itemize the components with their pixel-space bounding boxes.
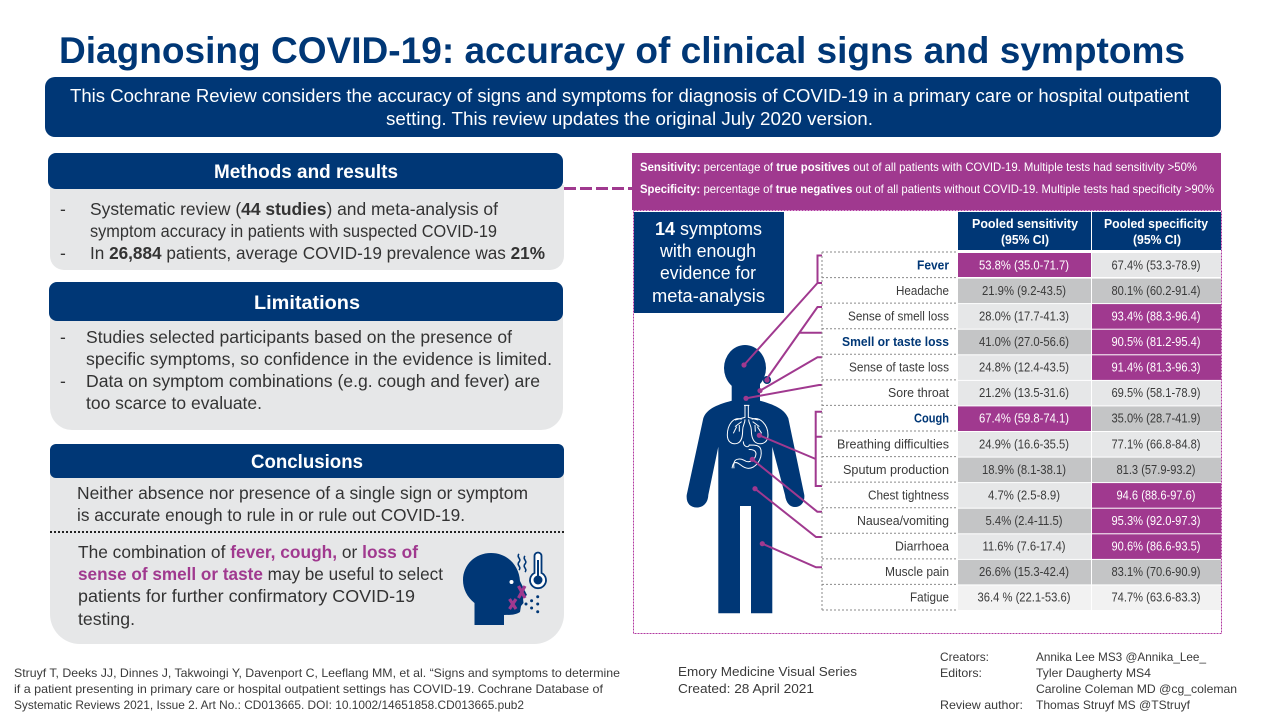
panel: accuracy figure bbox=[634, 210, 1222, 634]
row: Sense of taste loss: Sense of taste loss bbox=[849, 361, 949, 375]
row: Fatigue: 36.4 % (22.1-53.6) bbox=[978, 591, 1070, 605]
connector lines to symptoms bbox=[741, 256, 822, 567]
heading: limitations bbox=[49, 282, 563, 321]
row: Sense of smell loss: Sense of smell loss bbox=[848, 309, 949, 323]
panel: conclusions bbox=[50, 444, 564, 644]
series credit: Emory Medicine Visual Series bbox=[678, 664, 858, 679]
row: Diarrhoea: 11.6% (7.6-17.4) bbox=[982, 540, 1066, 554]
row: Sputum production: 81.3 (57.9-93.2) bbox=[1116, 463, 1196, 477]
row: Chest tightness: Chest tightness bbox=[868, 488, 949, 502]
callout: 14 symptoms bbox=[634, 212, 784, 313]
intro banner bbox=[45, 77, 1221, 137]
row: Headache: 80.1% (60.2-91.4) bbox=[1112, 284, 1200, 298]
text: methods bullets: symptom accuracy in patients with suspected COVID-19 bbox=[90, 221, 497, 241]
callout: 14 symptoms: meta-analysis bbox=[652, 286, 765, 306]
text: limitations bullets bbox=[60, 327, 552, 413]
row: Sense of smell loss: 93.4% (88.3-96.4) bbox=[1112, 309, 1200, 323]
citation bbox=[14, 666, 620, 712]
text: combination conclusion: sense of smell or taste may be useful to select bbox=[78, 564, 443, 584]
series credit: Created: 28 April 2021 bbox=[678, 681, 814, 696]
row: Muscle pain: Muscle pain bbox=[885, 565, 949, 579]
citation: Systematic Reviews 2021, Issue 2. Art No.: CD013665. DOI: 10.1002/14651858.CD013665.pub2 bbox=[14, 698, 524, 712]
heading: conclusions bbox=[50, 444, 564, 478]
icon: lungs and stomach bbox=[727, 405, 768, 468]
row: Headache: Headache bbox=[896, 284, 949, 298]
row: Headache: 21.9% (9.2-43.5) bbox=[982, 284, 1066, 298]
row: Fever bbox=[917, 253, 1221, 277]
row: Nausea/vomiting: 95.3% (92.0-97.3) bbox=[1112, 514, 1200, 528]
text: methods bullets: Systematic review (44 studies) and meta-analysis of bbox=[90, 199, 498, 219]
row: Nausea/vomiting bbox=[857, 509, 1221, 533]
text: methods bullets: - bbox=[60, 243, 66, 263]
creators and editors: Thomas Struyf MS @TStruyf bbox=[1036, 698, 1191, 712]
text: methods bullets: - bbox=[60, 199, 66, 219]
callout: 14 symptoms: 14 symptoms bbox=[655, 219, 762, 239]
text: combination conclusion: The combination of fever, cough, or loss of bbox=[78, 542, 418, 562]
row: Smell or taste loss: 90.5% (81.2-95.4) bbox=[1112, 335, 1200, 349]
panel: definitions bbox=[632, 153, 1221, 210]
intro banner: setting. This review updates the original July 2020 version. bbox=[386, 109, 873, 129]
icon: human body bbox=[687, 345, 804, 613]
row: Sense of taste loss bbox=[849, 355, 1221, 380]
callout: 14 symptoms: with enough bbox=[659, 241, 756, 261]
text: single sign conclusion: Neither absence nor presence of a single sign or symptom bbox=[77, 483, 528, 503]
row: Sputum production: Sputum production bbox=[843, 463, 949, 477]
creators and editors: Review author: bbox=[940, 698, 1023, 712]
row: Muscle pain: 83.1% (70.6-90.9) bbox=[1112, 565, 1200, 579]
row: Chest tightness: 4.7% (2.5-8.9) bbox=[988, 488, 1060, 502]
row: Smell or taste loss: Smell or taste loss bbox=[842, 335, 949, 349]
row: Diarrhoea bbox=[895, 534, 1221, 559]
citation: if a patient presenting in primary care or hospital outpatient settings has COVID-19. Cochrane Database of bbox=[14, 682, 604, 696]
text: limitations bullets: - bbox=[60, 371, 66, 391]
row: Diarrhoea: 90.6% (86.6-93.5) bbox=[1112, 540, 1200, 554]
text: limitations bullets: - bbox=[60, 327, 66, 347]
title: Diagnosing COVID-19: accuracy of clinical signs and symptoms bbox=[59, 30, 1185, 71]
table header: Pooled sensitivity bbox=[972, 217, 1078, 231]
row: Sore throat bbox=[888, 381, 1221, 405]
row: Headache bbox=[896, 279, 1221, 303]
text: limitations bullets: specific symptoms, so confidence in the evidence is limited. bbox=[86, 349, 552, 369]
callout: 14 symptoms: evidence for bbox=[660, 263, 756, 283]
row: Nausea/vomiting: 5.4% (2.4-11.5) bbox=[986, 514, 1062, 528]
text: methods bullets bbox=[60, 199, 545, 263]
text: combination conclusion: testing. bbox=[78, 609, 135, 629]
heading: methods and results bbox=[48, 153, 563, 189]
text: limitations bullets: Data on symptom combinations (e.g. cough and fever) are bbox=[86, 371, 540, 391]
row: Cough: 67.4% (59.8-74.1) bbox=[979, 412, 1069, 426]
row: Muscle pain bbox=[885, 560, 1221, 584]
row: Breathing difficulties: 77.1% (66.8-84.8) bbox=[1112, 437, 1200, 451]
panel: definitions: Sensitivity: percentage of true positives out of all patients with COVID-19. Multiple tests had sensitivity >50% bbox=[640, 160, 1197, 174]
creators and editors: Caroline Coleman MD @cg_coleman bbox=[1036, 682, 1237, 696]
text: methods bullets: In 26,884 patients, average COVID-19 prevalence was 21% bbox=[90, 243, 545, 263]
row: Fatigue bbox=[910, 585, 1221, 610]
row: Sense of taste loss: 24.8% (12.4-43.5) bbox=[979, 361, 1069, 375]
table header bbox=[958, 212, 1221, 250]
row: Fever: Fever bbox=[917, 258, 949, 272]
creators and editors: Tyler Daugherty MS4 bbox=[1036, 666, 1151, 680]
creators and editors: Annika Lee MS3 @Annika_Lee_ bbox=[1036, 650, 1206, 664]
text: combination conclusion bbox=[78, 542, 443, 629]
creators and editors bbox=[940, 650, 1237, 712]
panel: definitions: Specificity: percentage of true negatives out of all patients without COVID-19. Multiple tests had specificity >90% bbox=[640, 182, 1214, 196]
text: single sign conclusion bbox=[77, 483, 528, 525]
row: Breathing difficulties: 24.9% (16.6-35.5) bbox=[979, 437, 1069, 451]
table header: (95% CI) bbox=[1133, 233, 1181, 247]
panel: limitations bbox=[49, 282, 563, 430]
row: Muscle pain: 26.6% (15.3-42.4) bbox=[979, 565, 1069, 579]
creators and editors: Editors: bbox=[940, 666, 982, 680]
row: Sore throat: 69.5% (58.1-78.9) bbox=[1112, 386, 1200, 400]
row: Chest tightness bbox=[868, 483, 1221, 508]
row: Smell or taste loss: 41.0% (27.0-56.6) bbox=[979, 335, 1069, 349]
row: Breathing difficulties: Breathing difficulties bbox=[837, 437, 949, 451]
panel: methods and results bbox=[48, 153, 564, 270]
text: single sign conclusion: is accurate enough to rule in or rule out COVID-19. bbox=[77, 505, 465, 525]
row: Cough: 35.0% (28.7-41.9) bbox=[1112, 412, 1200, 426]
heading: conclusions: Conclusions bbox=[251, 452, 363, 473]
row: Sore throat: Sore throat bbox=[888, 386, 950, 400]
row: Smell or taste loss bbox=[842, 330, 1221, 354]
row: Fatigue: 74.7% (63.6-83.3) bbox=[1112, 591, 1200, 605]
heading: methods and results: Methods and results bbox=[214, 162, 398, 183]
row: Cough: Cough bbox=[914, 412, 949, 426]
dashed connector bbox=[564, 187, 632, 190]
row: Fever: 67.4% (53.3-78.9) bbox=[1112, 258, 1200, 272]
row: Sore throat: 21.2% (13.5-31.6) bbox=[979, 386, 1069, 400]
row: Cough bbox=[914, 406, 1221, 431]
intro banner: This Cochrane Review considers the accuracy of signs and symptoms for diagnosis of COVID-19 in a primary care or hospital outpatient bbox=[70, 86, 1189, 106]
text: limitations bullets: Studies selected participants based on the presence of bbox=[86, 327, 512, 347]
row: Sputum production: 18.9% (8.1-38.1) bbox=[982, 463, 1066, 477]
table header: (95% CI) bbox=[1001, 233, 1049, 247]
table header: Pooled specificity bbox=[1104, 217, 1208, 231]
row: Fever: 53.8% (35.0-71.7) bbox=[979, 258, 1069, 272]
heading: limitations: Limitations bbox=[254, 293, 360, 314]
row: Chest tightness: 94.6 (88.6-97.6) bbox=[1116, 488, 1196, 502]
icon: sick head with thermometer bbox=[463, 552, 546, 625]
row: Breathing difficulties bbox=[837, 432, 1221, 457]
row: Sense of smell loss: 28.0% (17.7-41.3) bbox=[979, 309, 1069, 323]
row: Sense of smell loss bbox=[848, 304, 1221, 329]
row: Diarrhoea: Diarrhoea bbox=[895, 540, 949, 554]
text: limitations bullets: too scarce to evaluate. bbox=[86, 393, 262, 413]
row: Sputum production bbox=[843, 458, 1221, 482]
row: Nausea/vomiting: Nausea/vomiting bbox=[857, 514, 949, 528]
creators and editors: Creators: bbox=[940, 650, 989, 664]
row: Sense of taste loss: 91.4% (81.3-96.3) bbox=[1112, 361, 1200, 375]
citation: Struyf T, Deeks JJ, Dinnes J, Takwoingi Y, Davenport C, Leeflang MM, et al. “Signs and symptoms to determine bbox=[14, 666, 620, 680]
text: combination conclusion: patients for further confirmatory COVID-19 bbox=[78, 586, 415, 606]
row: Fatigue: Fatigue bbox=[910, 591, 949, 605]
series credit bbox=[678, 664, 858, 696]
